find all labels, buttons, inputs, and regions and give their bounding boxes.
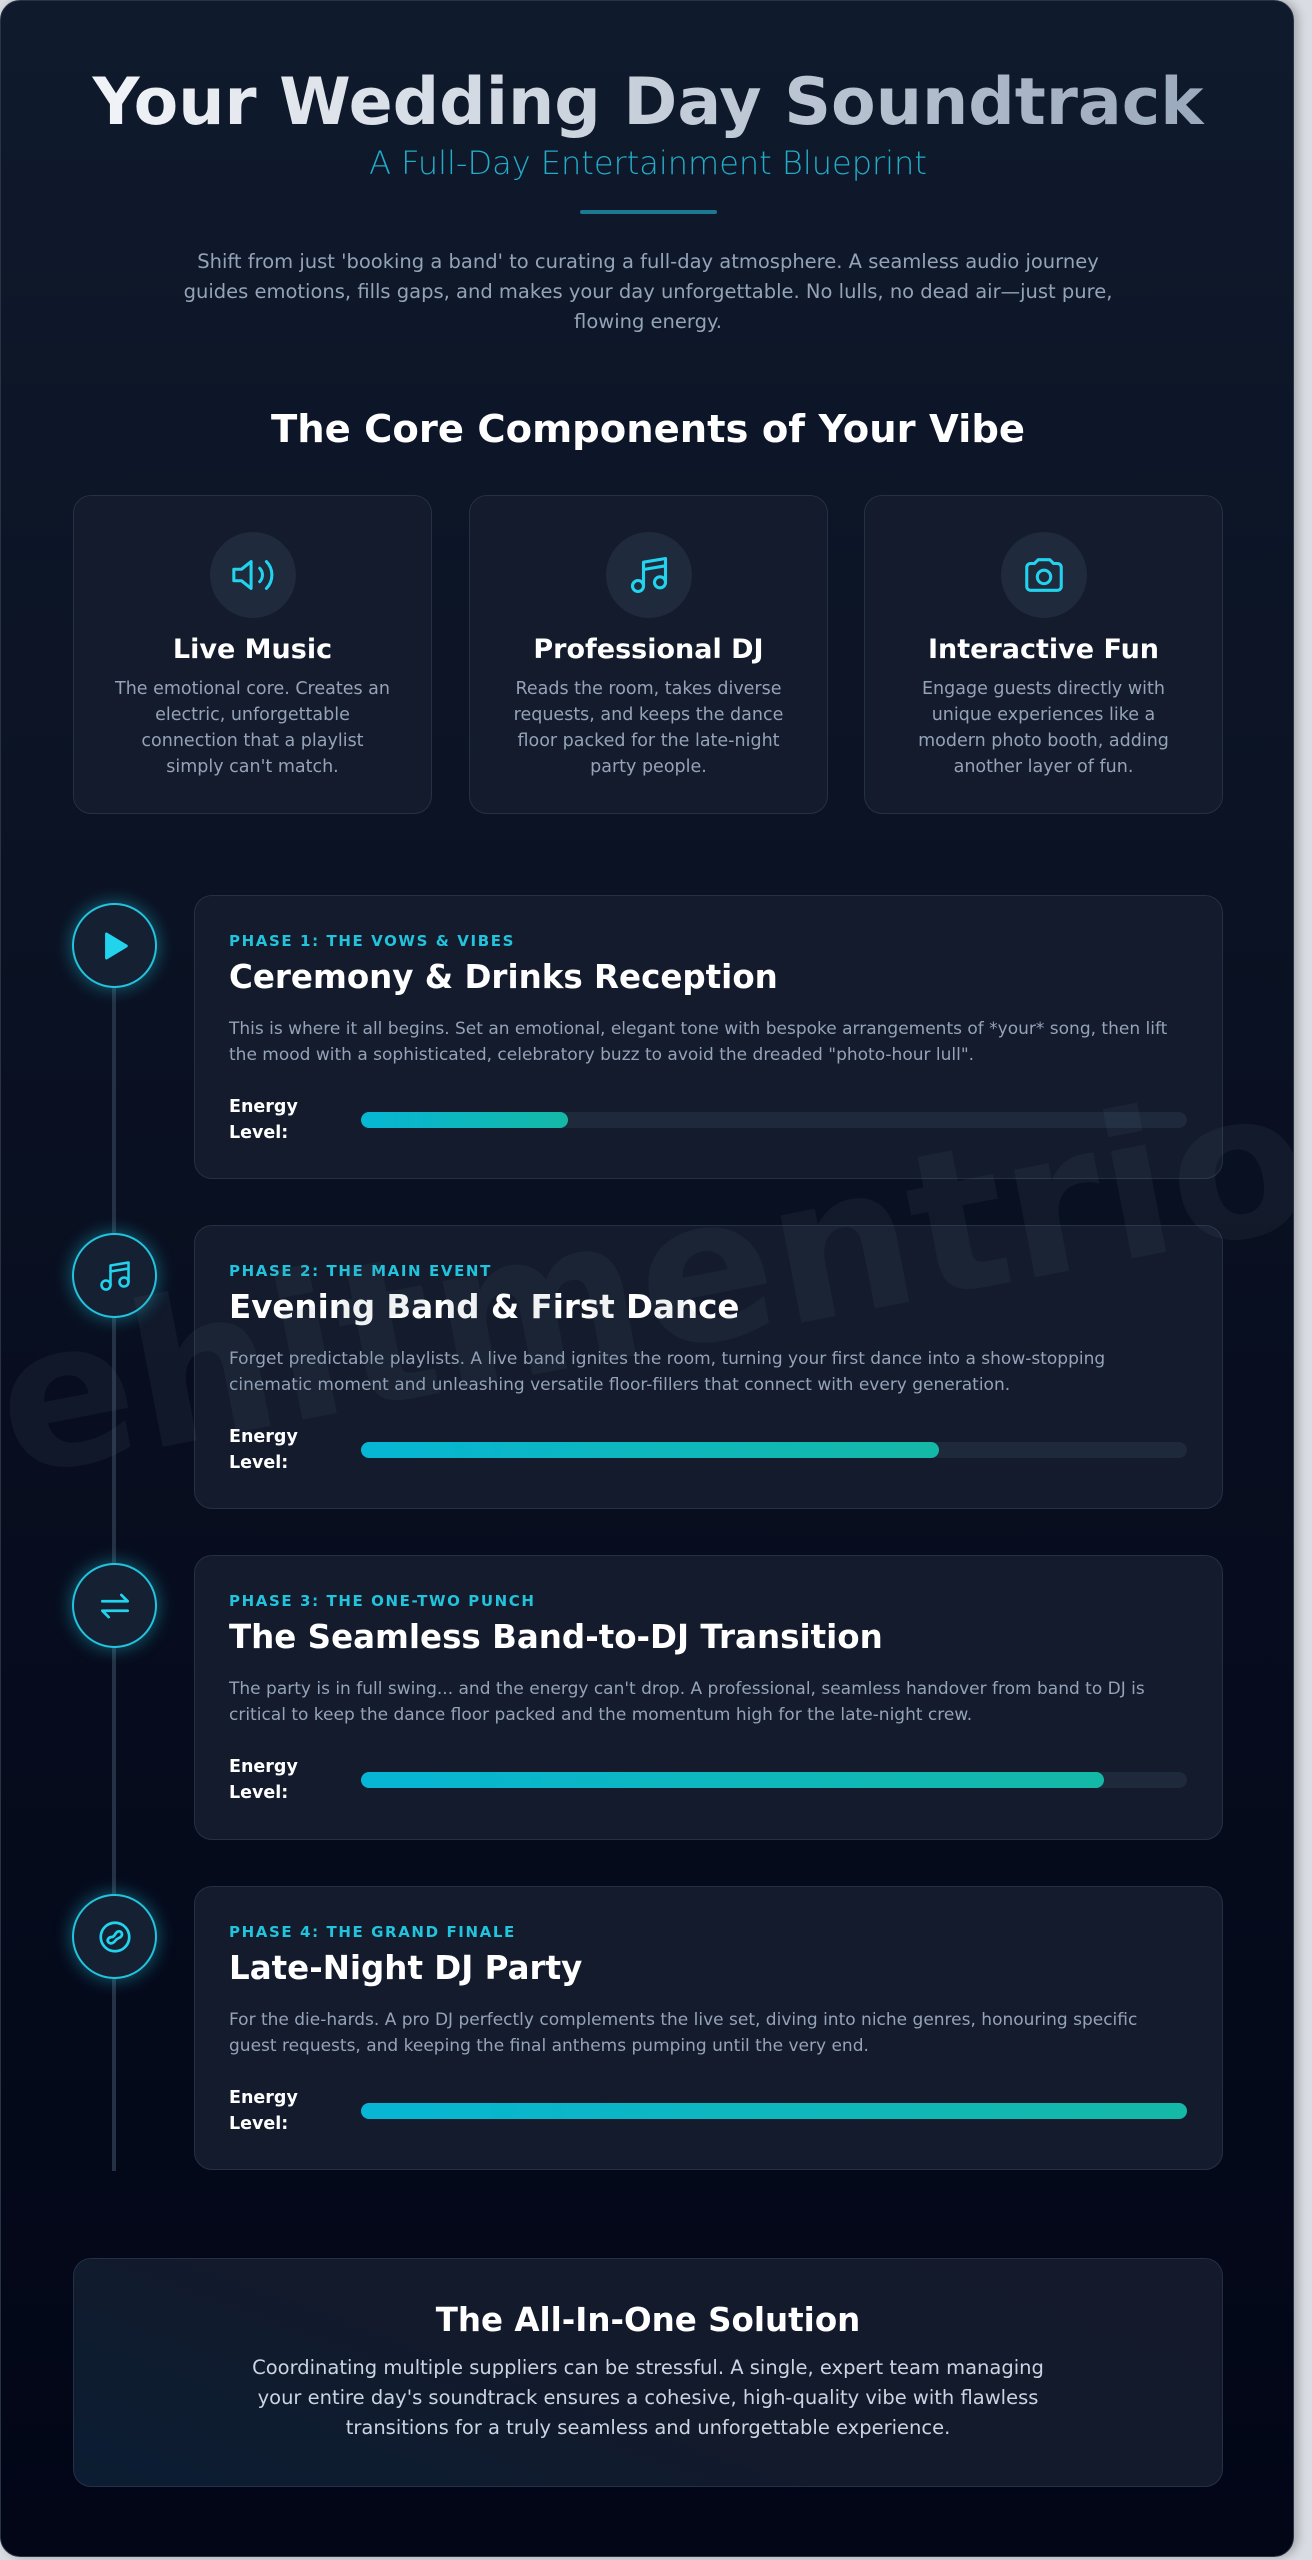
- card: professional dj: [469, 495, 828, 814]
- node: phase 4 disc: [72, 1894, 157, 1979]
- panel: phase 2: Level:: [229, 1453, 288, 1473]
- panel: phase 3: [194, 1555, 1223, 1840]
- energy bar 70%: [361, 1442, 1187, 1458]
- energy bar 100%: [361, 2103, 1187, 2119]
- energy bar 25%: [361, 1112, 1187, 1128]
- node: phase 3 transition: [72, 1563, 157, 1648]
- panel: phase 3: The Seamless Band-to-DJ Transition: [229, 1618, 883, 1656]
- panel: phase 4: Late-Night DJ Party: [229, 1949, 582, 1987]
- card: interactive fun: Interactive Fun: [928, 634, 1159, 665]
- panel: phase 3: PHASE 3: THE ONE-TWO PUNCH: [229, 1592, 536, 1610]
- panel: phase 1: Level:: [229, 1123, 288, 1143]
- panel: phase 1: Energy: [229, 1097, 298, 1117]
- timeline line: [112, 946, 116, 2171]
- panel: phase 4: Level:: [229, 2114, 288, 2134]
- card: professional dj: Reads the room, takes diverse requests, and keeps the dance floor packed for the late-night party people.: [514, 679, 783, 777]
- panel: phase 4: [194, 1886, 1223, 2170]
- panel: phase 4: Energy: [229, 2088, 298, 2108]
- panel: all-in-one solution: [73, 2258, 1223, 2487]
- panel: phase 1: Ceremony & Drinks Reception: [229, 958, 778, 996]
- panel: phase 1: PHASE 1: THE VOWS & VIBES: [229, 932, 515, 950]
- panel: phase 3: The party is in full swing... and the energy can't drop. A professional, seamless handover from band to DJ is critical to keep the dance floor packed and the momentum high for the late-night crew.: [229, 1679, 1145, 1725]
- panel: phase 1: [194, 895, 1223, 1179]
- panel: phase 3: Energy: [229, 1757, 298, 1777]
- node: phase 1 play: [72, 903, 157, 988]
- panel: phase 3: Level:: [229, 1783, 288, 1803]
- panel: phase 2: Forget predictable playlists. A live band ignites the room, turning your first dance into a show-stopping cinematic moment and unleashing versatile floor-fillers that connect with every generation.: [229, 1349, 1105, 1395]
- intro text: Shift from just 'booking a band' to curating a full-day atmosphere. A seamless audio journey guides emotions, fills gaps, and makes your day unforgettable. No lulls, no dead air—just pure, flowing energy.: [184, 250, 1112, 333]
- section heading: The Core Components of Your Vibe: [271, 407, 1025, 452]
- panel: phase 2: PHASE 2: THE MAIN EVENT: [229, 1262, 492, 1280]
- title: Your Wedding Day Soundtrack: [92, 65, 1204, 140]
- panel: phase 1: This is where it all begins. Set an emotional, elegant tone with bespoke arrangements of *your* song, then lift the mood with a sophisticated, celebratory buzz to avoid the dreaded "photo-hour lull".: [229, 1019, 1167, 1065]
- node: phase 2 music: [72, 1233, 157, 1318]
- panel: phase 4: PHASE 4: THE GRAND FINALE: [229, 1923, 516, 1941]
- card: live music: The emotional core. Creates an electric, unforgettable connection that a playlist simply can't match.: [115, 679, 390, 777]
- panel: phase 2: Evening Band & First Dance: [229, 1288, 739, 1326]
- card: live music: [73, 495, 432, 814]
- icon: music note: [606, 532, 692, 618]
- card: live music: Live Music: [173, 634, 332, 665]
- subtitle: A Full-Day Entertainment Blueprint: [369, 144, 927, 182]
- panel: phase 2: Energy: [229, 1427, 298, 1447]
- card: interactive fun: Engage guests directly with unique experiences like a modern photo booth, adding another layer of fun.: [918, 679, 1169, 777]
- divider: [580, 210, 717, 214]
- card: interactive fun: [864, 495, 1223, 814]
- icon: speaker: [210, 532, 296, 618]
- panel: phase 2: [194, 1225, 1223, 1509]
- icon: camera: [1001, 532, 1087, 618]
- energy bar 90%: [361, 1772, 1187, 1788]
- panel: all-in-one solution: The All-In-One Solution: [436, 2301, 860, 2339]
- panel: phase 4: For the die-hards. A pro DJ perfectly complements the live set, diving into niche genres, honouring specific guest requests, and keeping the final anthems pumping until the very end.: [229, 2010, 1137, 2056]
- card: professional dj: Professional DJ: [533, 634, 764, 665]
- panel: all-in-one solution: Coordinating multiple suppliers can be stressful. A single, expert team managing your entire day's soundtrack ensures a cohesive, high-quality vibe with flawless transitions for a truly seamless and unforgettable experience.: [252, 2356, 1044, 2439]
